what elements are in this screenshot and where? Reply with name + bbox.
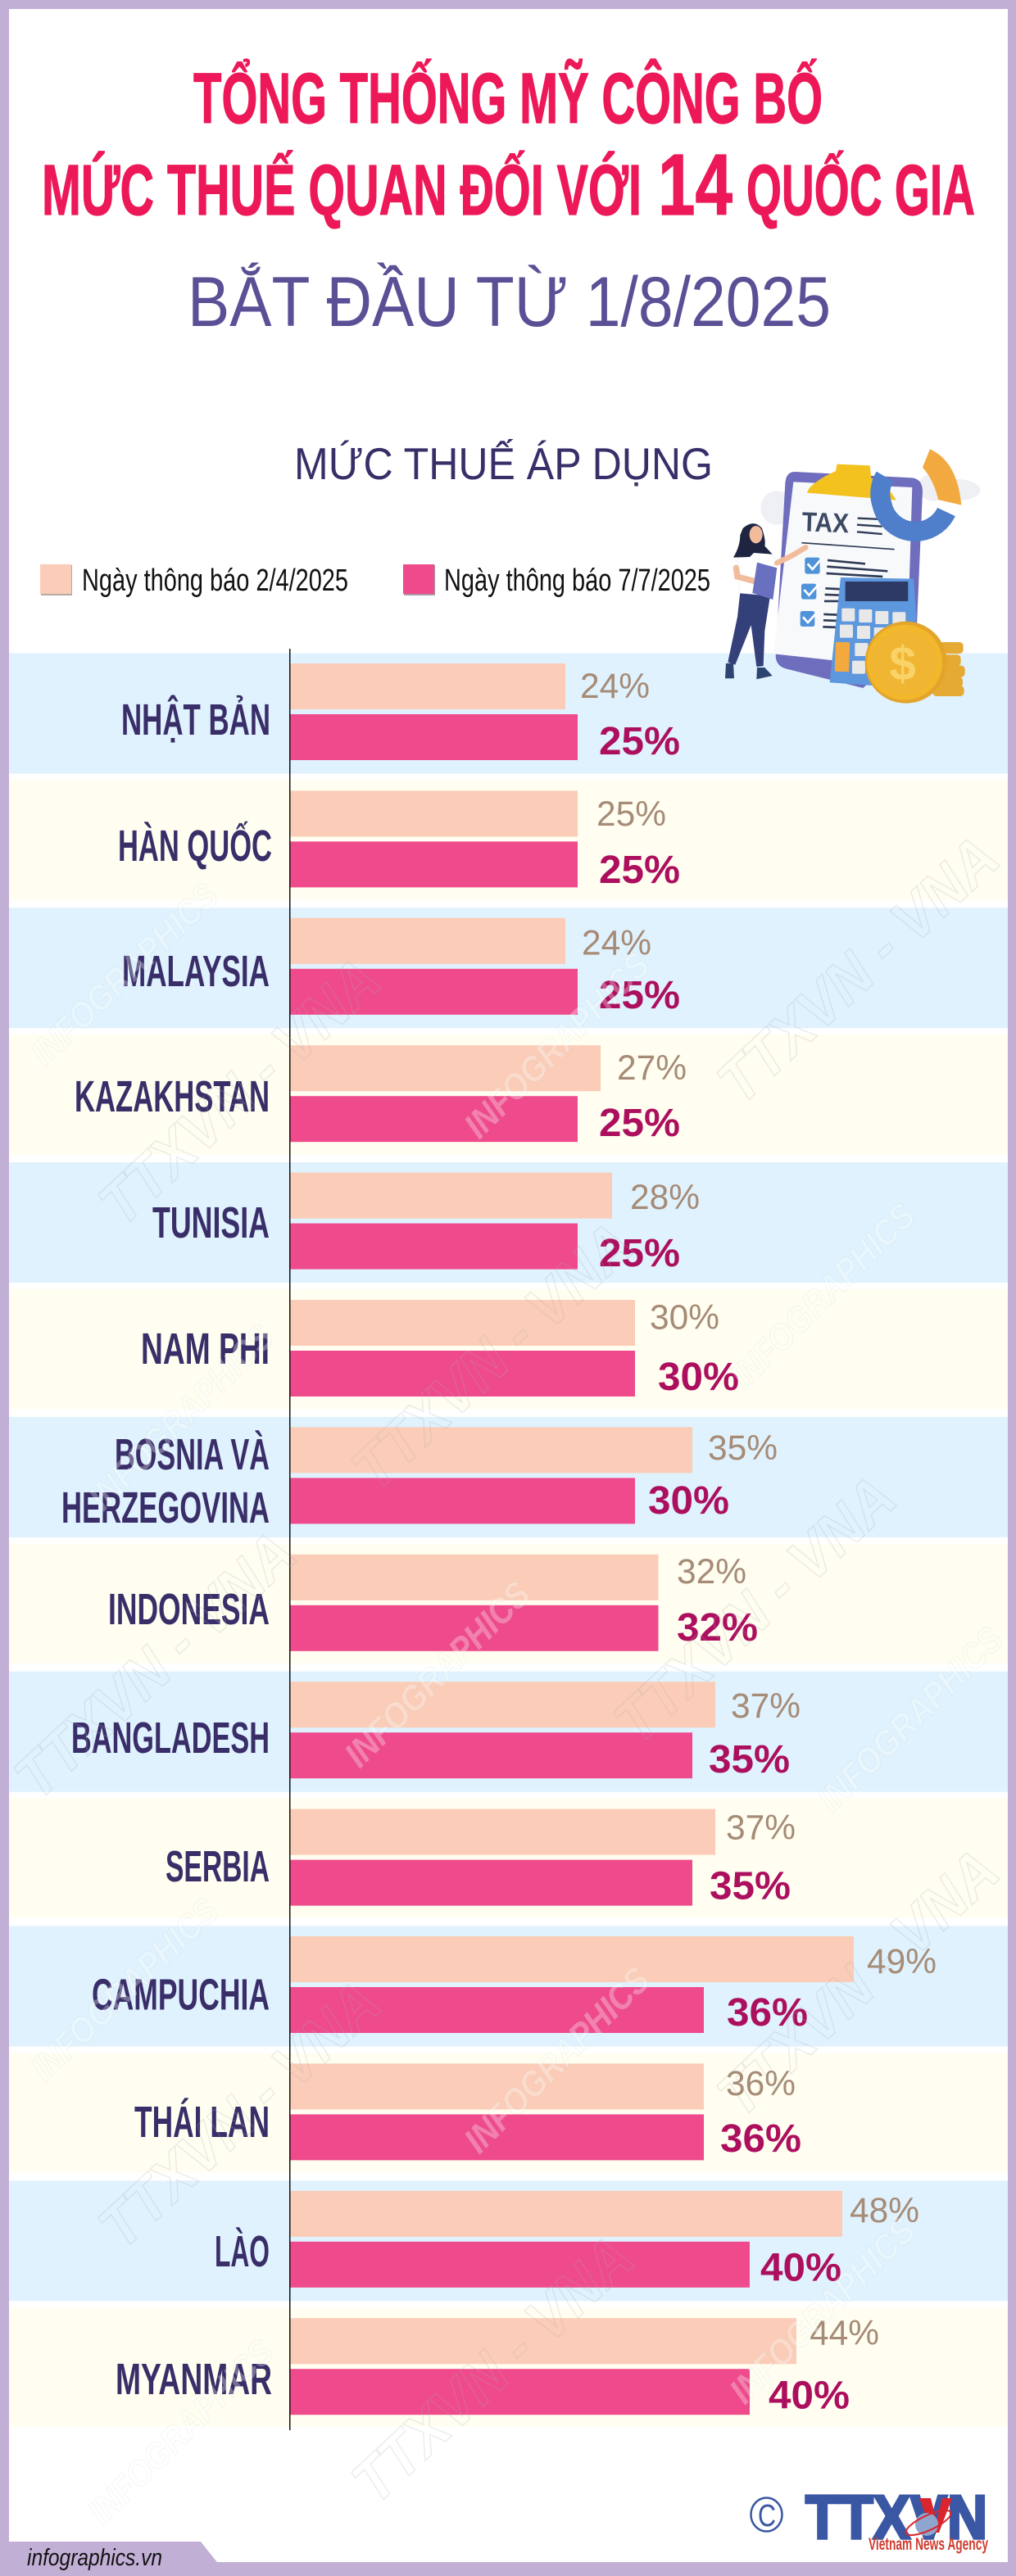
clipboard: TAX: [801, 507, 850, 539]
row: Serbia: SERBIA: [166, 1842, 270, 1891]
source: infographics.vn: infographics.vn: [27, 2545, 162, 2571]
title: [42, 59, 975, 233]
row: Bosnia và Herzegovina: 35%: [708, 1428, 778, 1468]
watermarks: INFOGRAPHICS: [722, 1196, 923, 1397]
row: Serbia: 35%: [710, 1864, 791, 1908]
row: Kazakhstan: 25%: [599, 1102, 680, 1145]
checkboxes: [801, 558, 823, 627]
row: Indonesia: 32%: [677, 1552, 746, 1591]
row: Nhật Bản: [9, 654, 1008, 773]
row: Bangladesh: [9, 1672, 1008, 1792]
row: Campuchia: 36%: [727, 1991, 808, 2035]
row: Kazakhstan: KAZAKHSTAN: [75, 1072, 270, 1121]
watermarks: INFOGRAPHICS: [23, 1890, 226, 2089]
row: Serbia: [9, 1799, 1008, 1918]
row: Lào: 40%: [760, 2246, 841, 2290]
row: Bangladesh: BANGLADESH: [71, 1714, 270, 1763]
row: Myanmar: [9, 2307, 1008, 2426]
watermarks: INFOGRAPHICS: [80, 2332, 282, 2533]
row: Thái Lan: [9, 2053, 1008, 2172]
title: 14: [658, 137, 733, 233]
clouds: [760, 473, 981, 525]
pie chart ring: [880, 449, 961, 532]
row: Malaysia: 25%: [599, 974, 680, 1017]
row: Indonesia: [9, 1544, 1008, 1664]
watermarks: TTXVN - VNA: [601, 1463, 909, 1756]
row: Bosnia và Herzegovina: BOSNIA VÀ: [115, 1430, 270, 1479]
row: Lào: LÀO: [215, 2227, 270, 2276]
watermarks: TTXVN - VNA: [1, 1519, 309, 1812]
watermarks: INFOGRAPHICS: [23, 876, 226, 1074]
row: Bangladesh: 35%: [709, 1738, 790, 1781]
illustration: tax form, calculator, coins and woman: [725, 449, 981, 704]
watermarks: INFOGRAPHICS: [456, 945, 658, 1146]
row: Bosnia và Herzegovina: [9, 1417, 1008, 1537]
row: Nam Phi: 30%: [658, 1356, 739, 1399]
row: Hàn Quốc: 25%: [599, 849, 680, 892]
copyright mark: C: [758, 2499, 776, 2533]
row: Thái Lan: THÁI LAN: [134, 2098, 270, 2147]
TTXVN logo: TTXVN: [805, 2483, 987, 2551]
section heading: MỨC THUẾ ÁP DỤNG: [294, 438, 713, 489]
row: Nam Phi: 30%: [650, 1298, 719, 1338]
bar chart: [9, 649, 1008, 2430]
row: Campuchia: [9, 1926, 1008, 2046]
row: Tunisia: TUNISIA: [152, 1198, 270, 1247]
watermarks: TTXVN - VNA: [85, 1968, 393, 2261]
row: Nhật Bản: NHẬT BẢN: [121, 695, 270, 745]
row: Nhật Bản: 24%: [580, 667, 650, 706]
row: Lào: 48%: [850, 2191, 919, 2230]
watermarks: INFOGRAPHICS: [337, 1574, 538, 1775]
watermarks: TTXVN - VNA: [85, 945, 393, 1238]
row: Tunisia: 28%: [630, 1178, 700, 1217]
row: Malaysia: [9, 908, 1008, 1028]
subtitle: start date: BẮT ĐẦU TỪ 1/8/2025: [188, 263, 831, 342]
watermarks: TTXVN - VNA: [338, 2223, 646, 2516]
row: Malaysia: MALAYSIA: [122, 947, 270, 996]
row: Tunisia: [9, 1162, 1008, 1283]
row: Nam Phi: NAM PHI: [141, 1324, 270, 1374]
row: Bosnia và Herzegovina: HERZEGOVINA: [61, 1483, 270, 1532]
watermarks: [1, 823, 1012, 2533]
row: Myanmar: 40%: [769, 2375, 850, 2418]
legend item: 7/7/2025: Ngày thông báo 7/7/2025: [444, 564, 710, 598]
watermarks: INFOGRAPHICS: [722, 2211, 923, 2411]
title: MỨC THUẾ QUAN ĐỐI VỚI: [42, 151, 642, 230]
row: Hàn Quốc: [9, 780, 1008, 899]
row: Campuchia: 49%: [867, 1942, 937, 1981]
legend item: 7/7/2025: [403, 564, 710, 598]
row: Bosnia và Herzegovina: 30%: [648, 1479, 729, 1523]
row: Indonesia: INDONESIA: [108, 1585, 270, 1634]
row: Malaysia: 24%: [582, 924, 651, 963]
row: Lào: [9, 2180, 1008, 2301]
legend item: 2/4/2025: [40, 564, 348, 598]
watermarks: INFOGRAPHICS: [456, 1960, 658, 2161]
legend item: 2/4/2025: Ngày thông báo 2/4/2025: [82, 564, 348, 598]
row: Kazakhstan: 27%: [617, 1048, 687, 1088]
row: Kazakhstan: [9, 1034, 1008, 1154]
row: Myanmar: MYANMAR: [116, 2355, 272, 2404]
row: Myanmar: 44%: [810, 2314, 879, 2353]
legend: [40, 564, 710, 598]
calculator: [830, 577, 916, 688]
woman presenting: [725, 523, 805, 679]
row: Campuchia: CAMPUCHIA: [92, 1971, 270, 2020]
row: Indonesia: 32%: [677, 1606, 758, 1650]
row: Nam Phi: [9, 1289, 1008, 1409]
row: Hàn Quốc: HÀN QUỐC: [118, 822, 272, 871]
row: Thái Lan: 36%: [720, 2117, 801, 2161]
row: Hàn Quốc: 25%: [596, 795, 666, 834]
row: Nhật Bản: 25%: [599, 720, 680, 763]
watermarks: TTXVN - VNA: [338, 1210, 646, 1503]
row: Serbia: 37%: [726, 1809, 796, 1848]
row: Thái Lan: 36%: [726, 2064, 796, 2103]
copyright mark: [751, 2498, 782, 2533]
row: Tunisia: 25%: [599, 1232, 680, 1275]
coins: [865, 622, 965, 704]
row: Bangladesh: 37%: [731, 1686, 801, 1726]
chart axis: [289, 649, 290, 2430]
clipboard: [773, 464, 923, 688]
watermarks: INFOGRAPHICS: [80, 1317, 282, 1518]
coins: $: [889, 637, 916, 690]
